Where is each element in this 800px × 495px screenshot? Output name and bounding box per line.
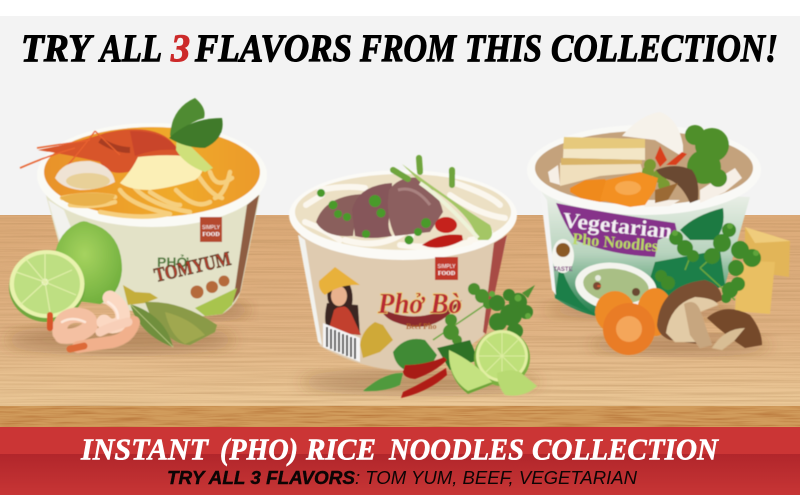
cup swoosh (380, 300, 462, 327)
brand logo (200, 217, 222, 242)
title: FLAVORS (194, 27, 352, 70)
cup side stripe (233, 195, 259, 303)
bowl: Pho Tom Yum (5, 98, 267, 354)
beef slices (316, 178, 443, 238)
footer heading (80, 432, 720, 466)
shrimps (50, 298, 134, 349)
chili slices (655, 146, 687, 167)
brand logo: FOOD (438, 271, 456, 277)
title (21, 27, 778, 70)
clam (55, 161, 115, 206)
footer subheading: : TOM YUM, BEEF, VEGETARIAN (355, 468, 638, 488)
bay leaves (130, 302, 217, 347)
soup (295, 174, 511, 250)
title: TRY (21, 27, 94, 70)
kaffir leaves (169, 98, 223, 148)
cup name: Vegetarian (561, 207, 673, 243)
cup name (561, 207, 673, 256)
carrot slices (570, 172, 658, 207)
lime half (9, 250, 85, 322)
footer heading: (PHO) (220, 432, 298, 466)
soup (535, 131, 753, 205)
tofu cubes (735, 227, 790, 314)
cup name: Beef Pho (406, 322, 436, 331)
cup body (298, 235, 507, 370)
title: 3 (170, 27, 190, 70)
footer heading: COLLECTION (532, 432, 720, 466)
title: THIS (465, 27, 542, 70)
cup badges (190, 276, 230, 298)
cup side stripe (483, 235, 507, 334)
red footer band (0, 427, 800, 495)
lime half (474, 330, 530, 386)
taste badge: TASTE (553, 267, 573, 273)
bowl: Pho Bo (289, 158, 540, 398)
cup name: PHỞ (157, 253, 188, 270)
title: ALL (97, 27, 162, 70)
brand logo: SIMPLY (202, 225, 221, 231)
purple label (556, 203, 677, 257)
squid (120, 155, 204, 190)
carrots (595, 288, 673, 355)
rice noodles (548, 165, 742, 207)
cup name: Phở Bò (377, 288, 462, 320)
cup name: Pho Noodles (572, 229, 660, 256)
cup left label (48, 200, 76, 248)
cup name (377, 288, 462, 331)
broccoli (685, 125, 729, 187)
barcode (323, 323, 360, 362)
cup left panel (540, 190, 556, 295)
mushroom on soup (656, 166, 698, 203)
cilantro and basil (363, 283, 535, 391)
brand logo: SIMPLY (438, 264, 456, 270)
daikon slice (622, 112, 683, 157)
tofu (560, 137, 645, 186)
chili slices (422, 217, 463, 248)
cup bottom band (195, 288, 237, 316)
rice plant (360, 322, 393, 358)
whole lime (54, 221, 122, 304)
brand logo (435, 257, 458, 280)
mushrooms (657, 280, 762, 350)
cilantro (655, 223, 761, 303)
red chilies (401, 357, 447, 398)
footer subheading: TRY ALL 3 FLAVORS (167, 468, 355, 488)
peas (642, 159, 670, 191)
lime wedge garnish (176, 133, 213, 172)
vietnamese woman illustration (319, 267, 361, 335)
lemongrass (123, 285, 158, 305)
footer subheading (167, 468, 638, 488)
soup (44, 127, 260, 217)
onion rings (317, 189, 431, 244)
lime wedge (449, 350, 493, 394)
rim (37, 123, 267, 227)
cup leaf graphic (680, 208, 724, 240)
noodles (62, 172, 232, 217)
taste badge (552, 239, 574, 273)
shrimp on soup (20, 129, 183, 173)
background wall (0, 16, 800, 216)
cup body (44, 188, 260, 317)
cup name: TOMYUM (152, 248, 233, 287)
rim (289, 170, 517, 260)
cup body (540, 190, 750, 317)
spring onion (393, 158, 492, 240)
small lime wedge (497, 370, 537, 396)
footer heading: INSTANT (80, 432, 209, 466)
footer heading: NOODLES (388, 432, 524, 466)
bowl: Vegetarian Pho Noodles (527, 112, 790, 355)
cup lower green (555, 250, 725, 317)
noodles (305, 183, 505, 247)
footer heading: RICE (305, 432, 376, 466)
noodle bowl picture (572, 258, 660, 316)
wooden table (0, 215, 800, 428)
title: FROM (359, 27, 457, 70)
rim (527, 125, 761, 215)
brand logo: FOOD (202, 232, 220, 238)
cup left label (298, 235, 322, 345)
